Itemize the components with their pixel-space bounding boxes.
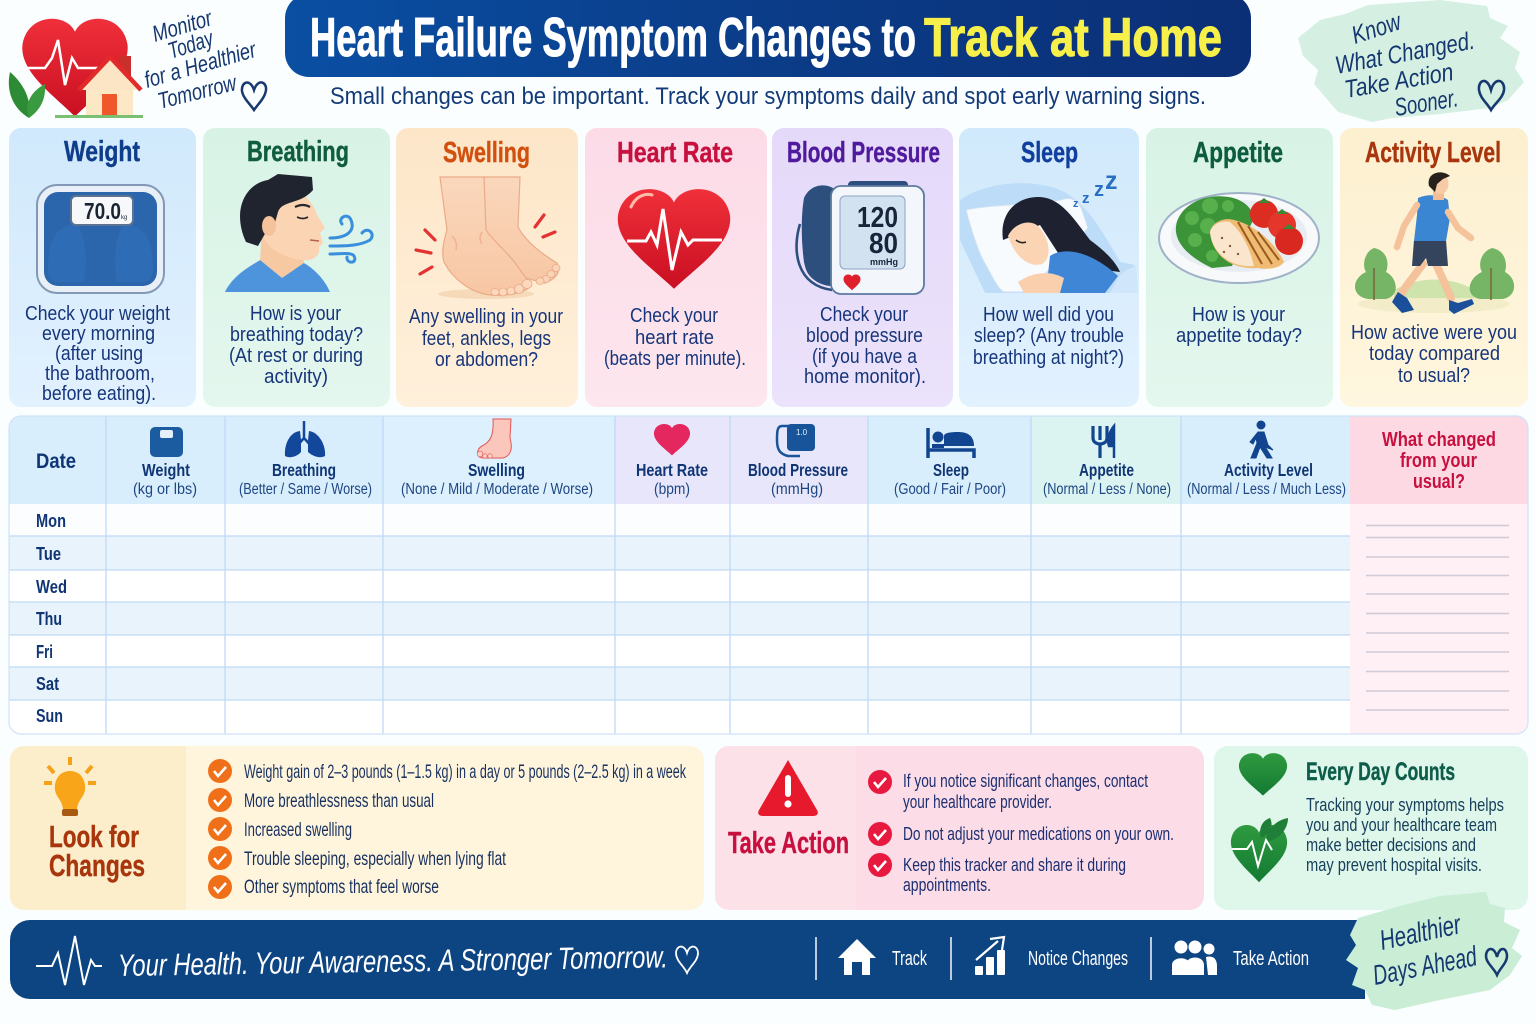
panel: swelling: Swelling [443,137,530,169]
appetite column header: Appetite [1079,460,1134,480]
activity column header: (Normal / Less / Much Less) [1187,481,1346,498]
breathing column header: Breathing [272,460,336,480]
weight column header: Weight [142,460,190,480]
weight prompt: the bathroom, [45,362,155,385]
every day counts text: make better decisions and [1306,834,1476,855]
icon: blood pressure monitor: 80 [869,228,898,260]
handwritten note: healthier days ahead: Days Ahead [1370,940,1480,991]
panel: blood pressure: Blood Pressure [787,137,940,169]
activity prompt: How active were you [1351,321,1517,344]
list: warning changes [208,759,686,899]
activity prompt [1351,321,1517,387]
icon: person sleeping: z [1094,179,1104,201]
icon: light bulb [44,757,96,816]
swelling prompt: Any swelling in your [409,305,563,328]
panel: sleep [959,128,1139,407]
heart rate prompt [604,304,746,370]
blood pressure prompt: Check your [820,303,908,326]
handwritten note: healthier days ahead: Healthier [1377,908,1465,956]
icon: home [838,939,876,975]
weekday labels: Sun [36,706,63,726]
list: warning changes: Weight gain of 2–3 pounds (1–1.5 kg) in a day or 5 pounds (2–2.5 kg) in a week [244,761,686,783]
icon: blood pressure monitor [797,181,924,294]
footer steps: Track [892,948,928,970]
panel: swelling [396,128,578,407]
activity prompt: to usual? [1398,364,1470,387]
panel: weight: Weight [64,136,140,168]
handwritten note: healthier days ahead [1346,892,1522,1010]
list: actions [868,770,1174,895]
swelling column header [401,419,593,498]
handwritten note: monitor today: Today [165,24,217,64]
blood pressure prompt: (if you have a [812,345,918,368]
icon: swollen feet [416,177,560,299]
weight column header: (kg or lbs) [133,481,197,498]
heart rate column header: Heart Rate [636,460,708,480]
breathing prompt: activity) [264,365,328,388]
weight prompt: Check your weight [25,302,170,325]
breathing prompt [229,302,363,388]
appetite prompt [1176,303,1302,347]
panel: breathing: Breathing [247,136,349,168]
breathing prompt: breathing today? [230,323,363,346]
weekday labels: Thu [36,609,62,629]
blood pressure prompt: blood pressure [806,324,923,347]
weight prompt: before eating). [42,382,156,405]
list: actions: your healthcare provider. [903,791,1052,812]
what changed notes column: What changed [1382,429,1496,451]
icon: person sleeping: z [1082,190,1090,207]
icon: bathroom scale: kg [121,215,127,221]
date header: Date [36,450,76,473]
list: actions: If you notice significant changes, contact [903,770,1148,791]
sleep column header: Sleep [933,460,969,480]
weekday labels: Wed [36,577,67,597]
weight column header [133,427,197,498]
list: warning changes: Trouble sleeping, especially when lying flat [244,848,506,870]
icon: blood pressure monitor: mmHg [870,257,898,267]
every day counts text [1306,794,1504,875]
appetite prompt: appetite today? [1176,324,1302,347]
heading: take action: Take Action [728,825,849,860]
panel: appetite [1146,128,1333,407]
panel: blood pressure [772,128,953,407]
icon: heart with pulse [618,189,730,289]
panel: activity level [1340,128,1528,407]
panel: take action [715,746,1204,910]
table rows [9,416,1350,734]
title banner: Heart Failure Symptom Changes to [310,6,916,68]
weekday labels: Mon [36,511,66,531]
heading: every day counts: Every Day Counts [1306,758,1455,786]
footer steps: Notice Changes [1028,948,1128,970]
subtitle: Small changes can be important. Track your symptoms daily and spot early warning signs. [330,83,1206,110]
panel: heart rate [585,128,767,407]
icon: warning triangle [758,760,818,816]
heart rate column header [636,424,708,498]
table header backgrounds [9,416,1350,504]
list: warning changes: Increased swelling [244,819,352,841]
weekday labels: Fri [36,642,53,662]
list: warning changes: Other symptoms that feel worse [244,876,439,898]
heart rate prompt: heart rate [635,326,714,349]
symptom tracking table [9,416,1528,734]
heading: look for changes: Look for [49,819,139,854]
appetite column header: (Normal / Less / None) [1043,481,1171,498]
icon: people [1172,940,1217,975]
appetite column header [1043,426,1171,498]
swelling prompt: or abdomen? [435,348,538,371]
panel: sleep: Sleep [1021,137,1078,169]
blood pressure prompt: home monitor). [804,365,926,388]
icon: person walking with trees [1355,172,1514,314]
heading: look for changes: Changes [49,848,145,883]
handwritten note: know what changed: Know [1348,7,1406,50]
heading: look for changes [49,819,145,883]
icon: person sleeping [960,167,1138,293]
breathing prompt: How is your [250,302,341,325]
breathing prompt: (At rest or during [229,344,363,367]
icon: person sleeping: z [1105,167,1118,195]
heart rate column header: (bpm) [654,481,690,498]
activity column header [1187,420,1346,498]
handwritten note: know what changed [1298,0,1524,122]
panel: breathing [203,128,390,407]
sleep column header: (Good / Fair / Poor) [894,481,1006,498]
list: warning changes: More breathlessness than usual [244,790,434,812]
breathing column header: (Better / Same / Worse) [239,481,372,498]
swelling column header: Swelling [468,460,525,480]
weekday labels [36,511,67,726]
handwritten note: monitor today: Tomorrow [155,69,240,114]
sleep prompt: sleep? (Any trouble [974,324,1124,347]
blood pressure column header: Blood Pressure [748,460,848,480]
icon: man breathing [225,174,372,292]
what changed notes column: usual? [1413,471,1465,493]
sleep prompt [973,303,1124,369]
icon: bathroom scale: 70.0 [84,198,121,224]
icon: person sleeping: z [1073,198,1079,210]
list: actions: Do not adjust your medications on your own. [903,823,1174,844]
panel: heart rate: Heart Rate [617,137,733,169]
what changed notes column: from your [1400,450,1477,472]
icon: plate of food [1159,193,1319,283]
swelling prompt [409,305,563,371]
swelling prompt: feet, ankles, legs [422,327,551,350]
blood pressure column header: (mmHg) [771,481,823,498]
handwritten note: know what changed: What Changed. [1333,27,1477,80]
handwritten note: know what changed: Take Action [1342,58,1455,104]
blood pressure prompt [804,303,926,388]
sleep column header [894,428,1006,498]
weight prompt: every morning [42,322,155,345]
weekday labels: Sat [36,674,59,694]
weight prompt: (after using [55,342,143,365]
blood pressure column header [748,424,848,498]
tagline: Your Health. Your Awareness. A Stronger Tomorrow. [118,939,668,983]
heart rate prompt: Check your [630,304,718,327]
heart rate prompt: (beats per minute). [604,347,746,370]
sleep prompt: How well did you [983,303,1114,326]
every day counts text: may prevent hospital visits. [1306,854,1482,875]
footer steps [816,937,1309,980]
handwritten note: monitor today: for a Healthier [141,36,260,93]
activity prompt: today compared [1369,342,1500,365]
icon: outline heart [676,947,698,973]
table outline [9,416,1528,734]
handwritten note: know what changed: Sooner. [1393,84,1460,122]
breathing column header [239,421,372,498]
icon: bathroom scale [37,185,164,293]
icon: rising chart [975,937,1005,975]
panel: every day counts [1214,746,1528,910]
panel: appetite: Appetite [1193,137,1283,169]
title banner: Track at Home [924,6,1222,68]
icon: pulse line [36,936,102,985]
weight prompt [25,302,170,405]
handwritten note: monitor today [141,4,260,114]
swelling column header: (None / Mild / Moderate / Worse) [401,481,593,498]
list: actions: Keep this tracker and share it during [903,854,1126,875]
footer banner [10,920,1365,999]
handwritten note: monitor today: Monitor [149,4,216,47]
blood pressure column header: 1.0 [796,428,808,437]
what changed notes column [1350,416,1528,734]
footer steps: Take Action [1233,948,1309,970]
appetite prompt: How is your [1192,303,1285,326]
panel: weight [9,128,196,407]
activity column header: Activity Level [1224,460,1313,480]
weekday labels: Tue [36,544,61,564]
icon: heart with home and leaves [9,19,143,118]
icon: green heart [1239,753,1287,796]
icon: green heart with leaves [1231,818,1288,882]
list: actions: appointments. [903,874,991,895]
sleep prompt: breathing at night?) [973,346,1124,369]
panel: look for changes [10,746,704,910]
icon: blood pressure monitor: 120 [857,202,898,234]
icon: outline heart [242,82,266,110]
